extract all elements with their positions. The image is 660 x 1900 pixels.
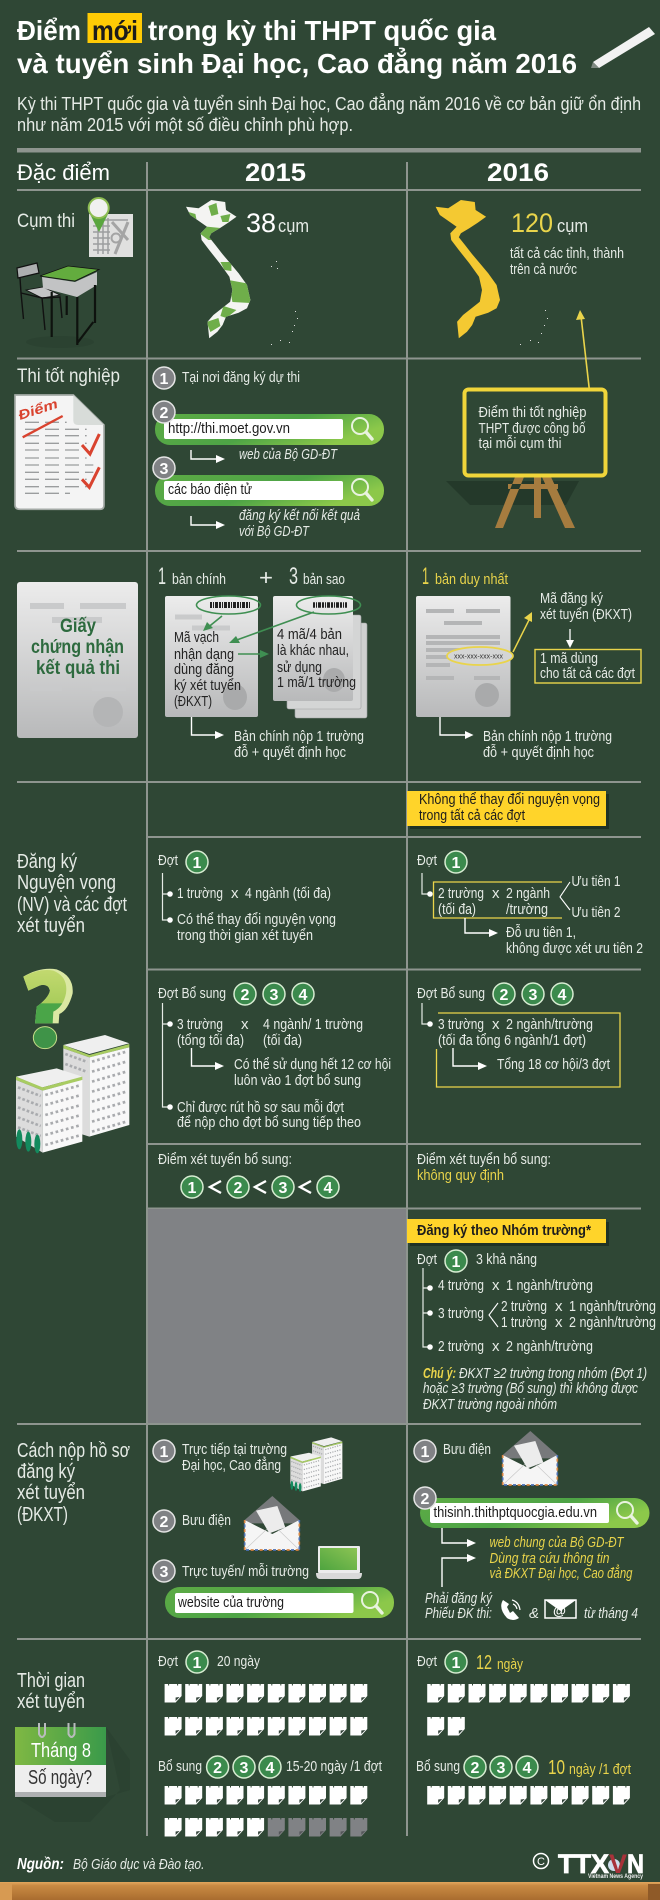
heading: single copy 2016: [422, 563, 509, 590]
icon: school buildings: [16, 1035, 129, 1153]
2016 round 1: [417, 851, 643, 957]
2015 submit: online: [153, 1546, 394, 1618]
2015 period additional: 15-20 ngày /1 đợt: [286, 1758, 383, 1775]
2016 period additional: Bổ sung: [416, 1758, 460, 1775]
2015 graduation: step 1: Tại nơi đăng ký dự thi: [182, 369, 300, 386]
2015 score rule: 3: [279, 1180, 288, 1197]
group registration options: 1 trường: [501, 1314, 547, 1331]
2016 additional rounds: x: [492, 1016, 500, 1033]
text: must register: Phiếu ĐK thi:: [425, 1605, 492, 1622]
2016 period additional: 3: [497, 1760, 506, 1777]
2016 period round 1: 1: [452, 1655, 461, 1672]
group registration options: 4 trường: [438, 1277, 484, 1294]
heading: 1 original + 3 copies: [158, 563, 345, 590]
2015 graduation: step 1: [153, 367, 300, 389]
2016 period additional: 2: [471, 1760, 480, 1777]
2016 submit: post: [414, 1431, 557, 1485]
2015 additional rounds: 4 ngành/ 1 trường: [263, 1016, 363, 1033]
document: original 2015: [165, 596, 258, 717]
arrow and caption: original submitted 2016: đỗ + quyết định học: [483, 744, 594, 761]
2016 additional rounds: 3: [529, 987, 538, 1004]
2015 additional rounds: Đợt Bổ sung: [158, 985, 226, 1002]
heading: 1 original + 3 copies: 1: [158, 563, 166, 590]
stat: 38 cụm: 38: [246, 208, 276, 238]
2015 round 1: 1 trường: [177, 885, 223, 902]
2015 round 1: 4 ngành (tối đa): [245, 885, 331, 902]
arrow: board to map: [576, 310, 592, 413]
document: original 2015: Mã vạch: [174, 629, 219, 646]
title: và tuyển sinh Đại học, Cao đẳng năm 2016: [17, 47, 577, 79]
2016 round 1: x: [492, 885, 500, 902]
group registration options: x: [555, 1298, 563, 1315]
title: [17, 13, 577, 79]
icon: easel board 2016: tại mỗi cụm thi: [478, 435, 562, 452]
source: Nguồn:: [17, 1856, 64, 1873]
2016 additional rounds: 2: [500, 987, 509, 1004]
2015 additional rounds: x: [241, 1016, 249, 1033]
icon: easel board 2016: THPT được công bố: [478, 420, 586, 437]
arrow and caption: newspapers: với Bộ GD-ĐT: [239, 523, 310, 540]
2016 period additional: ngày /1 đợt: [569, 1761, 632, 1778]
row label: Đăng ký nguyện vọng: Đăng ký: [17, 851, 77, 873]
2015 graduation: search bar newspapers: 3: [160, 461, 169, 478]
2015 round 1: x: [231, 885, 239, 902]
2015 graduation: search bar web: http://thi.moet.gov.vn: [168, 420, 290, 437]
arrow and caption: newspapers: [191, 507, 360, 540]
arrow: code to box: [566, 629, 574, 648]
arrow and caption: original submitted 2015: đỗ + quyết định học: [234, 744, 346, 761]
text: all provinces: [510, 245, 624, 278]
2015 additional rounds: Chỉ được rút hồ sơ sau mỗi đợt: [177, 1099, 345, 1116]
group registration options: 2 ngành/trường: [506, 1338, 593, 1355]
2016 period round 1: ngày: [497, 1656, 523, 1673]
callout: one code: cho tất cả các đợt: [540, 665, 636, 682]
arrow and caption: ministry site: web của Bộ GD-ĐT: [239, 446, 338, 463]
group registration options: 2 trường: [501, 1298, 547, 1315]
group registration options: [417, 1250, 656, 1355]
2015 additional rounds: 2: [241, 987, 250, 1004]
2016 score rule: không quy định: [417, 1167, 504, 1184]
row label: Đăng ký nguyện vọng: [17, 851, 127, 937]
2015 additional rounds: Có thể sử dụng hết 12 cơ hội: [234, 1056, 391, 1073]
2015 period round 1: 1: [193, 1655, 202, 1672]
stat: 38 cụm: cụm: [278, 216, 309, 236]
icon: question mark: [23, 969, 73, 1049]
2016 score rule: Điểm xét tuyển bổ sung:: [417, 1151, 551, 1168]
icon: score sheet: [15, 395, 104, 509]
2016 submit: post: Bưu điện: [443, 1441, 491, 1458]
2015 additional rounds: [158, 983, 391, 1131]
intro text: như năm 2015 với một số điều chỉnh phù hợp.: [17, 115, 353, 135]
2016 round 1: /trường: [506, 901, 548, 918]
2015 submit: post: [153, 1496, 299, 1550]
barcode callouts and green arrows: [196, 596, 360, 658]
note: Chú ý:: [423, 1365, 456, 1382]
2015 submit: online: website của trường: [177, 1594, 284, 1611]
2015 submit: direct: Trực tiếp tại trường: [182, 1441, 287, 1458]
2016 additional rounds: 2 ngành/trường: [506, 1016, 593, 1033]
row label: Cách nộp hồ sơ: đăng ký: [17, 1461, 75, 1483]
heading: single copy 2016: 1: [422, 563, 429, 590]
icon: score sheet: Điểm: [16, 396, 60, 423]
row label: Cách nộp hồ sơ: xét tuyển: [17, 1482, 85, 1504]
row label: Cách nộp hồ sơ: (ĐKXT): [17, 1504, 68, 1526]
2015 additional rounds: (tổng tối đa): [177, 1032, 244, 1049]
2016 period additional: [416, 1756, 632, 1779]
2016 additional rounds: [417, 983, 620, 1087]
panel: certificate label: [17, 582, 138, 738]
2015 period additional: 4: [266, 1760, 275, 1777]
text: must register: &: [529, 1605, 539, 1622]
2016 additional rounds: Đợt Bổ sung: [417, 985, 485, 1002]
2016 period round 1: [417, 1651, 523, 1674]
document: certificate 2016: xxx-xxx-xxx-xxx: [454, 652, 503, 660]
2015 score rule: 2: [234, 1180, 243, 1197]
row label: Cụm thi: Cụm thi: [17, 211, 75, 232]
source: [17, 1856, 204, 1873]
banner: group registration: Đăng ký theo Nhóm trường*: [417, 1222, 591, 1239]
row label: Thời gian xét tuyển: [17, 1670, 85, 1713]
2016 round 1: Ưu tiên 1: [572, 873, 620, 890]
document stack: copies 2015: 1 mã/1 trường: [277, 674, 356, 691]
2016 round 1: 2 trường: [438, 885, 484, 902]
callout: one code: 1 mã dùng: [540, 650, 598, 667]
table header: 2015: [245, 159, 306, 187]
text: all provinces: trên cả nước: [510, 261, 577, 278]
arrows and caption: common web: web chung của Bộ GD-ĐT: [490, 1534, 625, 1551]
chalk tray: [0, 1882, 660, 1900]
arrows and caption: common web: Dùng tra cứu thông tin: [490, 1550, 610, 1567]
table header: Đặc điểm: [17, 160, 110, 185]
row label: Thời gian xét tuyển: Thời gian: [17, 1670, 85, 1692]
note: ĐKXT trường ngoài nhóm: [423, 1396, 557, 1413]
title: trong kỳ thi THPT quốc gia: [148, 15, 496, 46]
2015 submit: direct: [153, 1437, 342, 1492]
2015 round 1: 1: [193, 855, 202, 872]
2016 additional rounds: 4: [558, 987, 567, 1004]
icon: calendar: Tháng 8: [31, 1740, 91, 1762]
logo: TTXVN: TTX: [558, 1849, 609, 1879]
group registration options: Đợt: [417, 1251, 438, 1268]
2016 submit: online search bar: [414, 1487, 650, 1528]
2016 round 1: 1: [452, 855, 461, 872]
2015 submit: direct: Đại học, Cao đẳng: [182, 1456, 281, 1474]
arrow: code callout: [513, 612, 532, 652]
document: original 2015: ký xét tuyển: [174, 677, 241, 694]
icon: calendar: Số ngày?: [28, 1767, 92, 1789]
2015 graduation: search bar newspapers: [153, 457, 384, 506]
table header: [17, 159, 549, 187]
2015 pictogram: 20 days: [165, 1684, 367, 1736]
document stack: copies 2015: 4 mã/4 bản: [277, 626, 342, 643]
icon: easel board 2016: [446, 390, 606, 528]
2016 round 1: Ưu tiên 2: [572, 904, 620, 921]
2016 round 1: Đỗ ưu tiên 1,: [506, 924, 576, 941]
icon: calendar: [15, 1723, 130, 1822]
grey panel: not applicable 2015: [148, 1209, 406, 1423]
arrow and caption: original submitted 2016: [440, 717, 612, 761]
2015 round 1: Có thể thay đổi nguyện vọng: [177, 911, 336, 928]
table header: 2016: [487, 159, 549, 187]
heading: 1 original + 3 copies: bản sao: [303, 571, 345, 588]
2015 round 1: trong thời gian xét tuyển: [177, 927, 313, 944]
2016 round 1: 2 ngành: [506, 885, 550, 902]
text: registration code: xét tuyển (ĐKXT): [540, 606, 632, 623]
group registration options: x: [492, 1277, 500, 1294]
stat: 120 cụm: 120: [511, 208, 553, 238]
banner: cannot change: trong tất cả các đợt: [419, 807, 526, 824]
text: must register: từ tháng 4: [584, 1605, 638, 1622]
document: original 2015: dùng đăng: [174, 661, 234, 678]
2015 submit: post: Bưu điện: [182, 1512, 231, 1529]
2015 graduation: step 1: 1: [160, 371, 169, 388]
document stack: copies 2015: [273, 596, 367, 718]
heading: 1 original + 3 copies: +: [259, 565, 273, 590]
logo: TTXVN: [534, 1849, 644, 1880]
2015 additional rounds: 4: [299, 987, 308, 1004]
2016 period additional: 10: [548, 1757, 565, 1779]
2016 round 1: Đợt: [417, 852, 438, 869]
group registration options: 2 trường: [438, 1338, 484, 1355]
group registration options: x: [492, 1338, 500, 1355]
heading: single copy 2016: bản duy nhất: [435, 571, 509, 588]
row label: Đăng ký nguyện vọng: (NV) và các đợt: [17, 894, 127, 916]
banner: group registration: [407, 1219, 609, 1246]
2015 submit: online: Trực tuyến/ mỗi trường: [182, 1563, 309, 1580]
2015 graduation: search bar web: 2: [160, 405, 169, 422]
2015 score rule: [158, 1151, 339, 1198]
2015 pictogram: 15-20 days: [165, 1786, 367, 1836]
row label: Đăng ký nguyện vọng: Nguyện vọng: [17, 872, 116, 894]
callout: one code: [535, 650, 641, 683]
2015 submit: online: 3: [160, 1564, 169, 1581]
2015 additional rounds: 3: [270, 987, 279, 1004]
document: original 2015: (ĐKXT): [174, 693, 212, 710]
map 2015: [186, 200, 298, 345]
group registration options: 1 ngành/trường: [506, 1277, 593, 1294]
2015 graduation: search bar web: [153, 401, 384, 445]
row label: Đăng ký nguyện vọng: xét tuyển: [17, 915, 85, 937]
2015 graduation: search bar newspapers: các báo điện tử: [168, 481, 252, 498]
2016 round 1: (tối đa): [438, 901, 476, 918]
text: all provinces: tất cả các tỉnh, thành: [510, 245, 624, 262]
row label: Cách nộp hồ sơ: Cách nộp hồ sơ: [17, 1440, 130, 1462]
2015 period additional: Bổ sung: [158, 1758, 202, 1775]
icon: chalk: [591, 27, 655, 68]
arrow and caption: original submitted 2016: Bản chính nộp 1 trường: [483, 728, 612, 745]
logo: TTXVN: V: [609, 1849, 627, 1879]
text: registration code: [540, 590, 632, 623]
text: registration code: Mã đăng ký: [540, 590, 603, 607]
icon: school desk and chair: [17, 263, 99, 348]
logo: TTXVN: N: [627, 1849, 644, 1879]
2016 submit: post: 1: [421, 1444, 430, 1461]
2015 submit: direct: 1: [160, 1444, 169, 1461]
document: original 2015: nhận dạng: [174, 646, 234, 663]
row label: Thi tốt nghiệp: Thi tốt nghiệp: [17, 366, 120, 387]
row label: Cách nộp hồ sơ: [17, 1440, 130, 1526]
2016 submit: online search bar: thisinh.thithptquocgia.edu.vn: [434, 1504, 597, 1521]
stat: 38 cụm: [246, 208, 309, 238]
2015 period additional: 2: [213, 1760, 222, 1777]
2015 period round 1: 20 ngày: [217, 1653, 260, 1670]
text: must register: [425, 1590, 638, 1622]
arrow and caption: original submitted 2015: Bản chính nộp 1 trường: [234, 728, 364, 745]
arrow and caption: ministry site: [191, 446, 338, 463]
banner: cannot change: Không thể thay đổi nguyện vọng: [419, 791, 600, 808]
note: [423, 1365, 647, 1413]
arrow and caption: original submitted 2015: [192, 717, 364, 761]
group registration options: 3 khả năng: [476, 1251, 537, 1268]
panel: certificate label: Giấy: [60, 616, 96, 637]
arrow and caption: newspapers: đăng ký kết nối kết quả: [239, 507, 360, 524]
2015 additional rounds: 3 trường: [177, 1016, 223, 1033]
2015 additional rounds: để nộp cho đợt bổ sung tiếp theo: [177, 1114, 361, 1131]
document stack: copies 2015: sử dụng: [277, 659, 322, 676]
map 2016: [436, 200, 548, 345]
group registration options: 1: [452, 1254, 461, 1271]
2015 period additional: [158, 1756, 383, 1778]
row label: Thời gian xét tuyển: xét tuyển: [17, 1691, 85, 1713]
source: Bộ Giáo dục và Đào tạo.: [73, 1856, 204, 1873]
panel: certificate label: kết quả thi: [36, 658, 120, 679]
2016 submit: online search bar: 2: [421, 1491, 430, 1508]
2016 pictogram: 10 days: [427, 1786, 630, 1804]
2016 period round 1: 12: [476, 1652, 492, 1674]
2015 additional rounds: (tối đa): [263, 1032, 302, 1049]
2016 pictogram: 12 days: [427, 1684, 630, 1736]
2016 period additional: 4: [523, 1760, 532, 1777]
2016 score rule: [417, 1151, 551, 1184]
2015 period round 1: [158, 1651, 260, 1673]
title: mới: [92, 15, 138, 46]
2015 round 1: [158, 851, 336, 944]
logo: TTXVN: Vietnam News Agency: [588, 1873, 643, 1880]
text: must register: Phải đăng ký: [425, 1590, 493, 1607]
2015 submit: post: 2: [160, 1514, 169, 1531]
2016 period round 1: Đợt: [417, 1653, 438, 1670]
2015 round 1: Đợt: [158, 852, 179, 869]
2015 score rule: 1: [188, 1180, 197, 1197]
group registration options: 3 trường: [438, 1305, 484, 1322]
title: Điểm: [17, 15, 81, 46]
banner: cannot change: [407, 791, 609, 829]
2015 additional rounds: luôn vào 1 đợt bổ sung: [234, 1072, 361, 1089]
arrows and caption: common web: [442, 1528, 633, 1587]
logo: TTXVN: C: [537, 1856, 545, 1868]
2015 period additional: 3: [240, 1760, 249, 1777]
group registration options: x: [555, 1314, 563, 1331]
intro text: [17, 93, 641, 135]
stat: 120 cụm: [511, 208, 588, 238]
panel: certificate label: chứng nhận: [31, 637, 124, 658]
heading: 1 original + 3 copies: bản chính: [172, 571, 226, 588]
icon: easel board 2016: Điểm thi tốt nghiệp: [478, 404, 586, 421]
2015 score rule: Điểm xét tuyển bổ sung:: [158, 1151, 292, 1168]
2015 score rule: 4: [324, 1180, 333, 1197]
text: must register: @: [553, 1603, 566, 1618]
2015 period round 1: Đợt: [158, 1653, 179, 1670]
document: certificate 2016: [416, 596, 513, 717]
document stack: copies 2015: là khác nhau,: [277, 642, 349, 659]
2016 additional rounds: 3 trường: [438, 1016, 484, 1033]
stat: 120 cụm: cụm: [557, 216, 588, 236]
icon: map pin on street map: [89, 198, 133, 257]
2016 additional rounds: Tổng 18 cơ hội/3 đợt: [497, 1056, 611, 1073]
heading: 1 original + 3 copies: 3: [289, 563, 298, 590]
2016 additional rounds: (tối đa tổng 6 ngành/1 đợt): [438, 1032, 586, 1049]
